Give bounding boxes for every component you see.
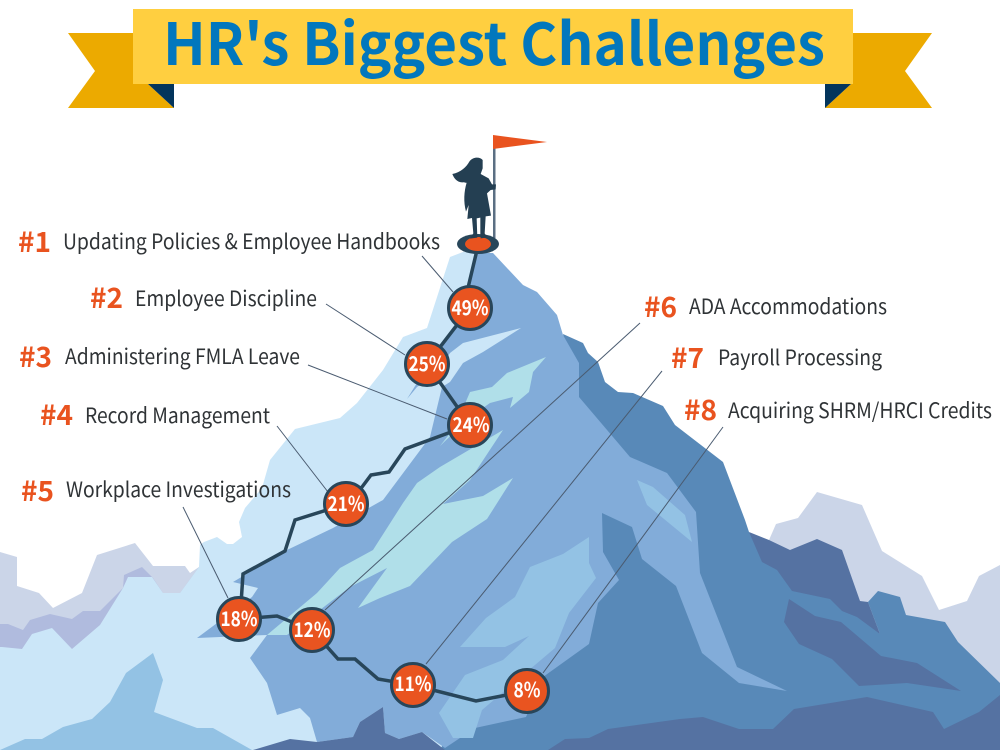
marker 25%: 25%	[408, 348, 446, 377]
item 4	[40, 394, 270, 434]
item 8	[684, 389, 992, 429]
item 2	[90, 277, 317, 317]
leader lines	[183, 256, 723, 673]
item 3: #3	[19, 336, 52, 376]
marker 12%	[290, 608, 334, 652]
flag and pole	[493, 135, 547, 238]
item 7: #7	[671, 337, 704, 377]
item 3	[19, 336, 300, 376]
item 5	[21, 470, 291, 510]
item 2: Employee Discipline	[135, 283, 317, 313]
marker 18%	[218, 598, 260, 640]
item 1: Updating Policies & Employee Handbooks	[63, 226, 440, 256]
item 5: #5	[21, 470, 54, 510]
marker 24%	[448, 404, 492, 446]
marker 21%: 21%	[328, 488, 364, 517]
marker 8%	[506, 670, 548, 712]
item 6	[644, 286, 887, 326]
marker 49%	[448, 286, 492, 330]
marker 24%: 24%	[452, 409, 490, 438]
marker 49%: 49%	[452, 292, 488, 321]
item 7	[671, 337, 882, 377]
title: HR's Biggest Challenges	[163, 0, 825, 82]
climbing route	[240, 250, 527, 701]
item 3: Administering FMLA Leave	[65, 341, 300, 371]
mountain range illustration	[0, 250, 1000, 750]
marker 18%: 18%	[220, 603, 258, 632]
item 1: #1	[18, 221, 51, 261]
marker 11%: 11%	[394, 668, 432, 697]
item 8: #8	[684, 389, 717, 429]
item 4: #4	[40, 394, 73, 434]
item 6: ADA Accommodations	[689, 291, 887, 321]
item 4: Record Management	[85, 400, 270, 430]
item 6: #6	[644, 286, 677, 326]
banner	[68, 0, 932, 108]
item 7: Payroll Processing	[718, 342, 882, 372]
item 5: Workplace Investigations	[66, 474, 291, 504]
marker 21%	[324, 482, 368, 526]
summit marker	[457, 234, 499, 254]
marker 8%: 8%	[514, 674, 540, 703]
marker 25%	[406, 342, 448, 386]
item 1	[18, 221, 440, 261]
item 2: #2	[90, 277, 123, 317]
marker 11%	[392, 664, 434, 706]
figure silhouette	[452, 158, 496, 239]
marker 12%: 12%	[294, 614, 330, 643]
